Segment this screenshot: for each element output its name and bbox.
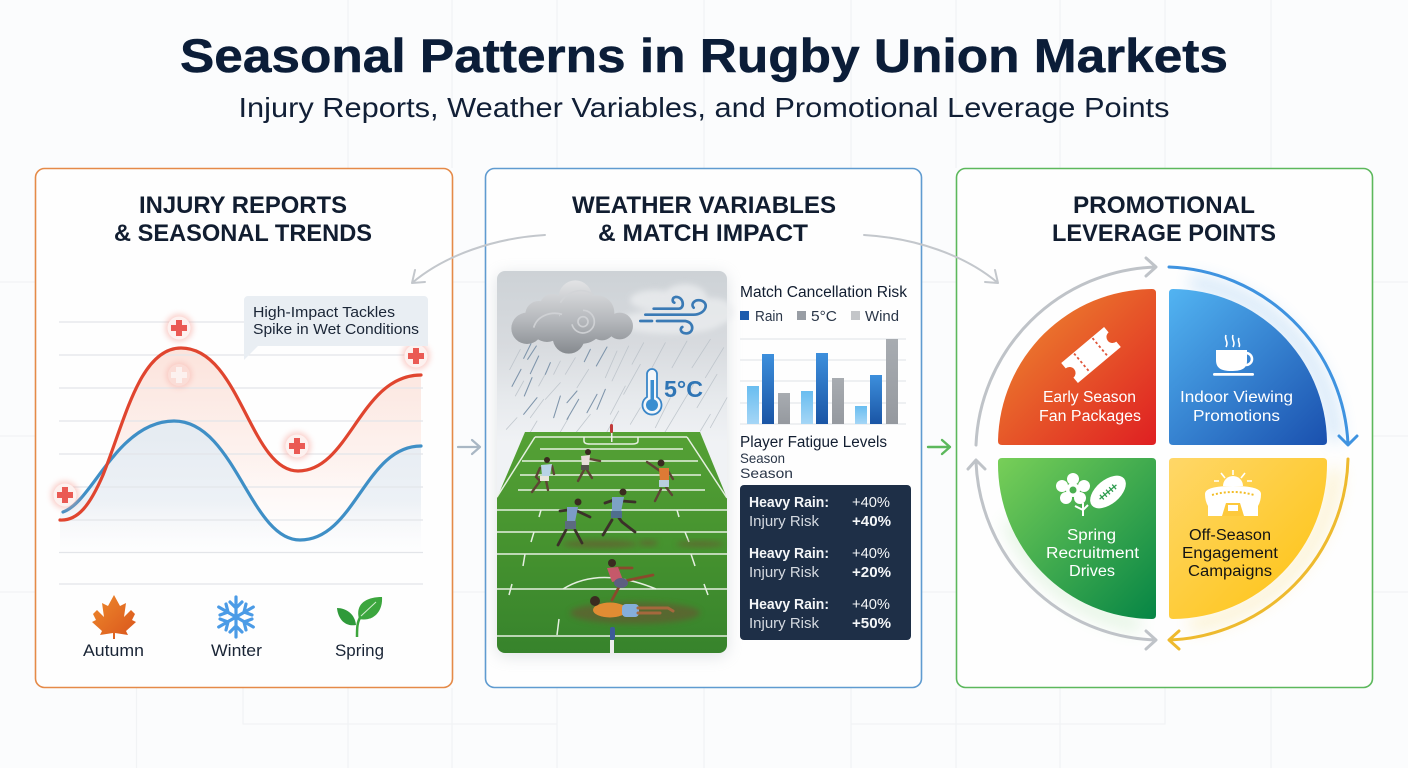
icon: sprout	[337, 597, 382, 637]
segment: early season fan packages	[998, 289, 1156, 445]
season: spring	[335, 597, 384, 660]
illustration: rainy rugby pitch	[497, 271, 734, 653]
referee near	[610, 627, 615, 653]
text: player fatigue levels: Season	[740, 465, 793, 481]
panel heading: promotional leverage points: LEVERAGE POINTS	[1052, 220, 1276, 247]
subtitle: Injury Reports, Weather Variables, and Promotional Leverage Points	[238, 92, 1170, 123]
segment: indoor viewing promotions: Indoor Viewing	[1180, 389, 1293, 406]
player kicking	[607, 559, 653, 600]
season: autumn: Autumn	[83, 642, 144, 660]
chart legend: Rain	[755, 308, 783, 325]
panel heading: injury reports: INJURY REPORTS	[139, 192, 347, 219]
title: Seasonal Patterns in Rugby Union Markets	[180, 29, 1228, 82]
callout: high-impact tackles: Spike in Wet Conditions	[253, 321, 419, 338]
rain streaks	[506, 339, 727, 438]
icon: stadium and sun	[1205, 470, 1261, 516]
cycle arrows	[968, 258, 1357, 649]
player 4	[603, 488, 635, 535]
icon: injury marker	[165, 314, 193, 342]
segment: early season fan packages: Fan Packages	[1039, 408, 1141, 425]
segment: off-season engagement campaigns: Off-Season	[1189, 527, 1271, 544]
icon: thermometer 5 degrees: 5°C	[664, 376, 703, 402]
segment: off-season engagement campaigns: Campaigns	[1188, 563, 1272, 580]
icon: injury marker	[51, 481, 79, 509]
segment: indoor viewing promotions	[1169, 289, 1327, 445]
bar chart: cancellation risk	[740, 339, 906, 424]
segment: indoor viewing promotions: Promotions	[1193, 408, 1280, 425]
arrow: weather to promotion	[864, 235, 998, 283]
icon: ticket	[1061, 327, 1121, 383]
player on ground	[590, 596, 673, 618]
arrow: blue arc	[1169, 267, 1357, 445]
text: match cancellation risk: Match Cancellation Risk	[740, 284, 907, 301]
segment: spring recruitment drives: Drives	[1069, 563, 1115, 580]
text: player fatigue levels: Season	[740, 450, 785, 466]
stats box: heavy rain and injury risk: Injury Risk	[749, 564, 819, 581]
icon: snowflake	[219, 597, 253, 637]
arrow: weather to promotion green	[928, 440, 950, 454]
icon: maple leaf	[92, 595, 136, 639]
icon: injury marker	[402, 342, 430, 370]
icon: injury marker faded	[166, 362, 192, 388]
line chart: seasonal injury trends	[51, 314, 430, 584]
icon: flower and rugby ball	[1056, 469, 1132, 516]
stats box: heavy rain and injury risk: +20%	[852, 564, 891, 581]
season: winter: Winter	[211, 642, 263, 660]
icon: thermometer 5 degrees	[642, 369, 703, 415]
segment: off-season engagement campaigns: Engagement	[1182, 545, 1279, 562]
player 5	[558, 498, 590, 545]
text: player fatigue levels: Player Fatigue Levels	[740, 434, 887, 451]
segment: early season fan packages: Early Season	[1043, 389, 1136, 406]
arrow: grey autumn arc	[976, 258, 1156, 445]
callout: high-impact tackles	[244, 296, 428, 360]
season: winter	[211, 597, 263, 660]
panel heading: injury reports: & SEASONAL TRENDS	[114, 220, 372, 247]
arrow: grey lower arc	[968, 460, 1156, 649]
panel heading: weather variables: & MATCH IMPACT	[598, 220, 808, 247]
stats box: heavy rain and injury risk: +50%	[852, 615, 891, 632]
stats box: heavy rain and injury risk: Injury Risk	[749, 615, 819, 632]
stats box: heavy rain and injury risk: Heavy Rain:	[749, 494, 829, 511]
stats box: heavy rain and injury risk	[740, 485, 911, 640]
panel heading: promotional leverage points: PROMOTIONAL	[1073, 192, 1255, 219]
stats box: heavy rain and injury risk: +40%	[852, 494, 890, 511]
referee far	[610, 424, 613, 442]
player 3	[647, 460, 673, 501]
segment: spring recruitment drives	[998, 458, 1156, 619]
season: autumn	[83, 595, 144, 660]
icon: injury marker	[283, 432, 311, 460]
segment: spring recruitment drives: Spring	[1067, 527, 1116, 544]
panel: weather variables	[486, 168, 922, 688]
chart legend: Wind	[865, 308, 899, 325]
stats box: heavy rain and injury risk: +40%	[852, 545, 890, 562]
panel heading: promotional leverage points	[1052, 192, 1276, 247]
panel heading: injury reports	[114, 192, 372, 247]
chart legend: 5°C	[811, 308, 837, 325]
season: spring: Spring	[335, 642, 384, 660]
callout: high-impact tackles: High-Impact Tackles	[253, 304, 395, 321]
arrow: weather to injury	[412, 235, 545, 283]
segment: off-season engagement campaigns	[1169, 458, 1327, 619]
icon: storm cloud	[511, 280, 633, 354]
player 2	[578, 449, 600, 481]
text: player fatigue levels	[740, 434, 887, 481]
segment: spring recruitment drives: Recruitment	[1046, 545, 1140, 562]
stats box: heavy rain and injury risk: Injury Risk	[749, 513, 819, 530]
players	[532, 424, 673, 653]
panel: promotional leverage points	[956, 168, 1372, 688]
stats box: heavy rain and injury risk: Heavy Rain:	[749, 545, 829, 562]
player 1	[532, 457, 554, 492]
stats box: heavy rain and injury risk: +40%	[852, 596, 890, 613]
pitch	[497, 432, 727, 653]
chart legend	[740, 308, 899, 325]
cloud bank	[618, 284, 734, 334]
panel heading: weather variables	[572, 192, 836, 247]
arrow: injury to weather	[458, 440, 480, 454]
panel: injury reports	[36, 168, 452, 688]
icon: coffee cup	[1213, 335, 1254, 376]
icon: wind	[640, 297, 706, 333]
stats box: heavy rain and injury risk: +40%	[852, 513, 891, 530]
stats box: heavy rain and injury risk: Heavy Rain:	[749, 596, 829, 613]
panel heading: weather variables: WEATHER VARIABLES	[572, 192, 836, 219]
arrow: yellow arc	[1169, 459, 1348, 649]
